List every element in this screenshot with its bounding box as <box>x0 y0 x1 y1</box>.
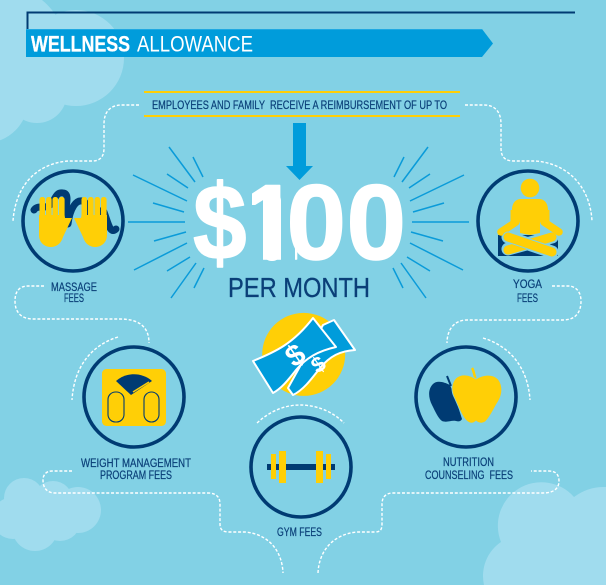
icon: money bills <box>253 313 355 396</box>
icon: weight scale <box>84 347 184 447</box>
amount: $100: 1 <box>240 162 300 282</box>
header frame line <box>28 12 575 29</box>
title banner <box>26 29 493 57</box>
icon: apples <box>416 347 516 447</box>
amount: $100: 00 <box>286 162 406 282</box>
amount: $100 <box>194 179 402 268</box>
icon: money bills: $ <box>279 337 312 374</box>
label: weight management program fees: WEIGHT MANAGEMENT <box>81 458 191 470</box>
label: yoga fees: FEES <box>517 293 538 305</box>
label: weight management program fees: PROGRAM FEES <box>100 470 172 482</box>
label: nutrition counseling fees <box>425 457 513 482</box>
label: massage fees <box>51 282 97 305</box>
amount: $100: $ <box>193 162 247 282</box>
cloud: bottom left <box>0 478 101 551</box>
icon: money bills: $ <box>306 351 330 378</box>
label: weight management program fees <box>81 458 191 482</box>
label: massage fees: FEES <box>64 293 84 305</box>
reimbursement statement: EMPLOYEES AND FAMILY RECEIVE A REIMBURSEMENT OF UP TO <box>152 100 447 112</box>
icon: massage hands <box>23 171 123 271</box>
sunburst rays <box>128 147 469 298</box>
title banner: ALLOWANCE <box>137 32 253 56</box>
per month: PER MONTH <box>228 272 370 303</box>
dashed connector paths <box>13 105 592 573</box>
label: nutrition counseling fees: COUNSELING FEES <box>425 470 513 482</box>
icon: yoga figure <box>478 171 578 271</box>
icon: dumbbell <box>251 417 351 517</box>
label: yoga fees: YOGA <box>513 279 542 291</box>
cloud: top left <box>0 0 124 143</box>
label: yoga fees <box>513 279 542 305</box>
label: nutrition counseling fees: NUTRITION <box>443 457 494 469</box>
down arrow <box>286 123 313 180</box>
cloud: bottom right <box>483 482 606 585</box>
label: massage fees: MASSAGE <box>51 282 97 294</box>
label: gym fees: GYM FEES <box>277 527 322 539</box>
title banner: WELLNESS <box>31 32 130 56</box>
